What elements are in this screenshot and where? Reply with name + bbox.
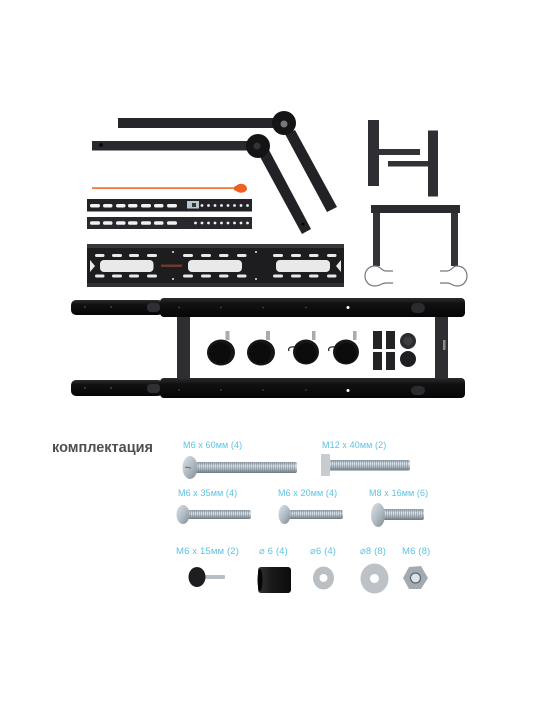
slotted rail lower (87, 217, 252, 229)
labels: first row: M6 x 60мм (4) (183, 440, 242, 450)
lower arm assembly (92, 134, 311, 234)
labels: third row (176, 546, 430, 557)
heading: комплектация (52, 440, 153, 456)
labels: first row (183, 440, 386, 450)
thumb screw (188, 567, 225, 587)
labels: third row: M6 (8) (402, 546, 430, 557)
labels: second row: M6 x 35мм (4) (178, 488, 237, 498)
labels: second row (178, 488, 428, 498)
felt pads (373, 331, 416, 370)
washer 6 (313, 566, 334, 590)
wall mounting plate (87, 244, 344, 287)
bolt M12x40 (321, 454, 410, 476)
labels: third row: ⌀6 (4) (310, 546, 336, 557)
orange cable tie (92, 184, 247, 193)
hex nut (403, 566, 428, 589)
slotted rail upper (87, 199, 252, 212)
upper arm assembly (118, 111, 337, 212)
screw M6x60 (182, 456, 297, 479)
washer 8 (360, 564, 388, 594)
labels: third row: M6 x 15мм (2) (176, 546, 239, 557)
labels: first row: M12 x 40мм (2) (322, 440, 386, 450)
T bracket left (368, 120, 420, 186)
labels: second row: M8 x 16мм (6) (369, 488, 428, 498)
screw M6x35 (176, 505, 251, 524)
caster wheels (207, 331, 359, 366)
labels: third row: ⌀8 (8) (360, 546, 386, 557)
labels: second row: M6 x 20мм (4) (278, 488, 337, 498)
screw M6x20 (278, 505, 343, 524)
screw M8x16 (371, 503, 424, 527)
labels: third row: ⌀ 6 (4) (259, 546, 288, 557)
clamp frame (365, 205, 467, 286)
telescopic frame (71, 298, 465, 398)
T bracket right (388, 130, 438, 196)
spacer sleeve (258, 567, 291, 593)
